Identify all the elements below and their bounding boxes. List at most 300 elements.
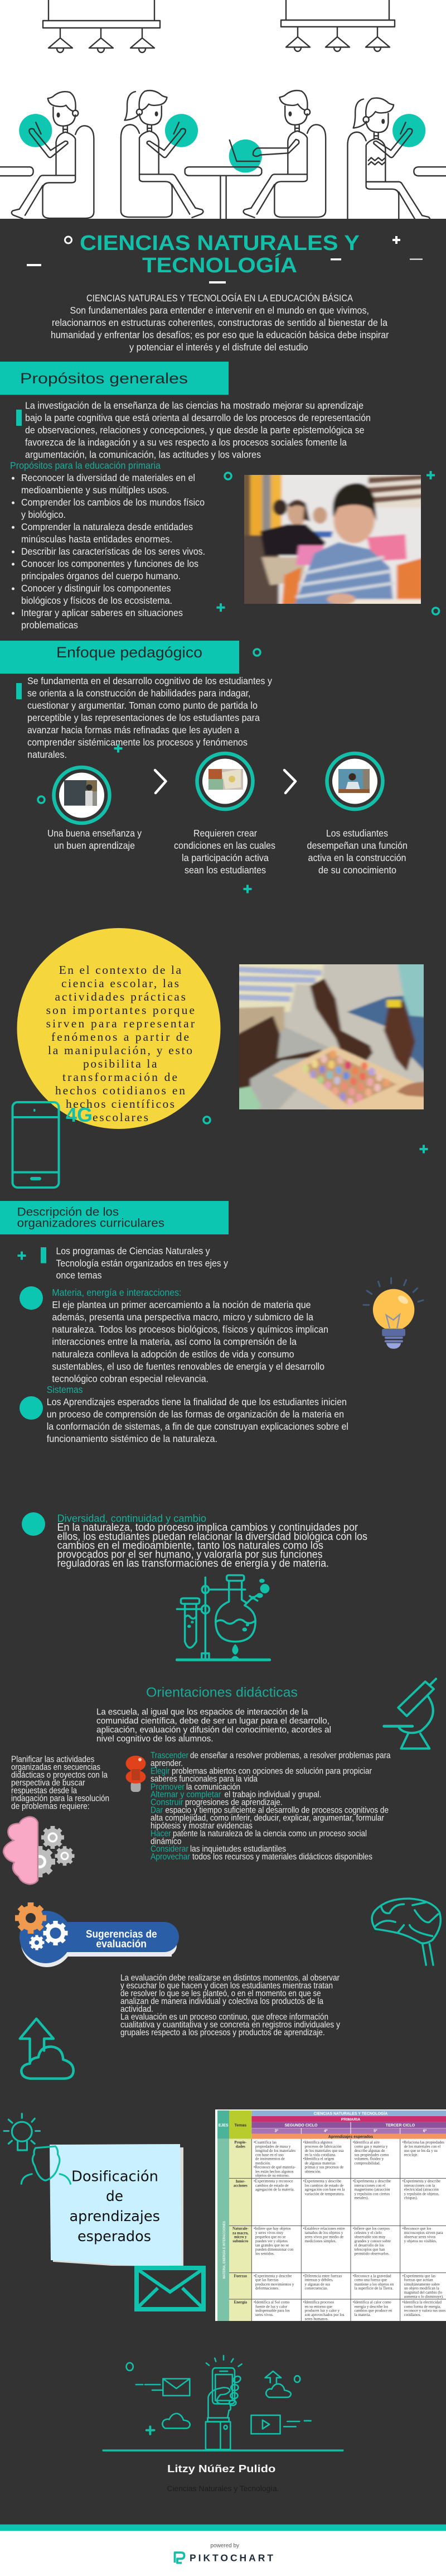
- heading: Descripción de los organizadores curriculares: [0, 1201, 229, 1234]
- row: Naturaleza macro, micro y submicro: •Reconoce que los: [403, 2227, 432, 2231]
- row: Naturaleza macro, micro y submicro: observable son muy: [355, 2235, 386, 2239]
- arrow: chevron 1: [155, 770, 166, 793]
- row: Interacciones: agregación con base en la: [305, 2188, 345, 2192]
- row: Energía: son aprovechados por los: [305, 2313, 345, 2317]
- badge: Sugerencias de evaluación: Sugerencias de: [86, 1929, 157, 1940]
- icon: chemistry flasks on stand: [177, 1575, 270, 1660]
- list: orientaciones didácticas: el trabajo individual y grupal.: [224, 1790, 321, 1800]
- row: Interacciones: magnetismo (atracción: [355, 2188, 390, 2192]
- text block: la escuela: La escuela, al igual que los espacios de interacción de la: [96, 1708, 308, 1717]
- axis 3: Diversidad, continuidad y cambio: ellos, los estudiantes puedan relacionar la diversidad biológica con los: [57, 1531, 367, 1542]
- photo: smiling boy in classroom: [244, 475, 421, 604]
- text block: planificar las actividades: indagación para la resolución: [11, 1794, 109, 1804]
- axis 1: Materia, energía e interacciones: además, presenta una perspectiva macro, micro y submicro de la: [52, 1311, 313, 1323]
- step 3: circular photo and caption: de su conocimiento: [318, 864, 396, 876]
- text block: introduction: humanidad y enfrentar los desafíos; es por eso que la educación básica debe inspirar: [51, 329, 389, 340]
- icon: arrow and cloud: [20, 2018, 74, 2079]
- row: Energía: la materia.: [355, 2313, 371, 2317]
- list: orientaciones didácticas: Hacer: [151, 1829, 171, 1838]
- callout: yellow circle with science text: sirven para representar: [46, 1017, 195, 1030]
- callout: yellow circle with science text: En el contexto de la: [59, 963, 181, 977]
- table column headers: TERCER CICLO: [386, 2123, 415, 2127]
- list: orientaciones didácticas: Elegir: [151, 1767, 170, 1776]
- author subtitle: Ciencias Naturales y Tecnología.: [167, 2484, 279, 2493]
- row: Naturaleza macro, micro y submicro: seres vivos por medio de: [305, 2235, 343, 2239]
- footer: powered by Piktochart: PIKTOCHART: [190, 2553, 273, 2564]
- callout: yellow circle with science text: ciencia escolar, las: [61, 977, 179, 990]
- callout: yellow circle with science text: escolares: [93, 1111, 148, 1124]
- row: Energía: •Identifica procesos: [303, 2300, 334, 2305]
- vertical axis label: MATERIA, ENERGÍA E INTERACCIONES: [221, 2221, 226, 2279]
- decorations: ring and plus: [203, 1117, 428, 1153]
- row: Propiedades: describe algunas de: [355, 2149, 385, 2153]
- row: Propiedades: con base en el uso: [255, 2152, 284, 2157]
- axis 2: Sistemas: [20, 1384, 348, 1444]
- row: Energía: fuente de luz y calor: [255, 2304, 288, 2309]
- axis 3: Diversidad, continuidad y cambio: reguladoras en las transformaciones de energía y de materia.: [57, 1558, 329, 1569]
- row: Energía: indispensable para los: [255, 2309, 290, 2313]
- photo: students in classroom: [338, 769, 370, 793]
- list: orientaciones didácticas: de enseñar a resolver problemas, a resolver problemas para: [190, 1751, 391, 1761]
- row: Fuerzas: un objeto modifican la: [404, 2286, 439, 2291]
- list: orientaciones didácticas: todos los recursos y materiales didácticos disponibles: [192, 1852, 372, 1862]
- text block: evaluación: La evaluación es un proceso continuo, que ofrece información: [120, 2012, 328, 2022]
- row: Naturaleza macro, micro y submicro: los sentidos.: [255, 2251, 275, 2256]
- text block: evaluación: [120, 1973, 340, 2037]
- row: Energía: cambios que produce en: [355, 2309, 392, 2313]
- row: Naturaleza macro, micro y submicro: [254, 2227, 443, 2256]
- text block: evaluación: La evaluación debe realizarse en distintos momentos, al observar: [120, 1973, 340, 1983]
- row: Energía: [254, 2300, 445, 2321]
- axis 3: Diversidad, continuidad y cambio: cambios en el medioambiente, tanto los naturales como los: [57, 1540, 323, 1551]
- row: Propiedades: propiedades de masa y: [255, 2145, 291, 2149]
- row: Propiedades: •Reconoce de qué materia-: [254, 2165, 296, 2170]
- row: Propiedades: reciclaje.: [404, 2152, 418, 2157]
- list: orientaciones didácticas: aprender.: [151, 1759, 183, 1768]
- text block: propósitos generales paragraph: favorezca de la indagación y a su ves respecto a los procesos sociales fomente la: [25, 436, 347, 448]
- row: Interacciones: los cambios de estado de: [305, 2183, 343, 2188]
- row: Fuerzas: que las fuerzas: [255, 2278, 279, 2282]
- logo mark: [175, 2553, 184, 2563]
- row: Naturaleza macro, micro y submicro: celestes y el cielo: [355, 2231, 382, 2235]
- list: orientaciones didácticas: dinámico: [151, 1837, 182, 1846]
- list: orientaciones didácticas: [151, 1751, 391, 1862]
- row: Fuerzas: fuerzas que actúan: [404, 2278, 433, 2282]
- axis 3: Diversidad, continuidad y cambio: Diversidad, continuidad y cambio: [57, 1513, 206, 1524]
- panel: sticky note Dosificación: de: [106, 2188, 123, 2205]
- list: orientaciones didácticas: progresiones de aprendizaje.: [185, 1798, 283, 1808]
- callout: yellow circle with science text: hechos científicos: [66, 1097, 174, 1111]
- row: Propiedades: •Cuantifica las: [254, 2140, 277, 2145]
- text block: propósitos generales paragraph: argumentación, la comunicación, las actitudes y los valores: [25, 449, 261, 460]
- row: Naturaleza macro, micro y submicro: observar seres vivos: [404, 2235, 436, 2239]
- row: Naturaleza macro, micro y submicro: y seres vivos muy: [255, 2231, 284, 2235]
- text block: propósitos generales paragraph: de observaciones, relaciones y concepciones, y que desde la parte epistemológica se: [25, 424, 365, 435]
- arrow: chevron 2: [284, 770, 295, 793]
- row: Fuerzas: consecuencias.: [305, 2286, 328, 2291]
- row: Interacciones: interacciones con la: [404, 2183, 435, 2188]
- row: Naturaleza macro, micro y submicro: pueden ver y objetos: [255, 2239, 288, 2243]
- step 1: circular photo and caption: Una buena enseñanza y: [47, 828, 142, 839]
- row: Naturaleza macro, micro y submicro: grandes y conoce sobre: [355, 2239, 391, 2243]
- photo: children with box of chalk: [239, 964, 424, 1109]
- row: Naturaleza macro, micro y submicro: tan grandes que no se: [255, 2243, 289, 2247]
- axis 1: Materia, energía e interacciones: sustentables, el uso de fuentes renovables de energía y el desarrollo: [52, 1361, 324, 1372]
- table column headers: 6º: [423, 2130, 427, 2133]
- row: Interacciones: chispas).: [404, 2196, 418, 2200]
- text block: enfoque pedagógico paragraph: naturales.: [27, 749, 67, 760]
- list: primary education purposes: Conocer y distinguir los componentes: [21, 583, 171, 594]
- row: Energía: como forma de energía,: [404, 2304, 441, 2309]
- list: orientaciones didácticas: hipótesis y mostrar evidencias: [151, 1821, 253, 1830]
- text block: evaluación: de resolver lo que se les planteó, o en el momento en que se: [120, 1989, 321, 1998]
- text block: enfoque pedagógico paragraph: [16, 675, 272, 760]
- heading: Propósitos generales: [0, 362, 229, 395]
- text block: programas intro: once temas: [56, 1270, 102, 1281]
- row: Propiedades: de los materiales que usa: [305, 2149, 343, 2153]
- icon: microscope: [384, 1679, 436, 1748]
- row: Propiedades: obtención.: [305, 2169, 321, 2174]
- callout: yellow circle with science text: [17, 928, 221, 1129]
- title: TECNOLOGÍA: [142, 253, 297, 277]
- icon: 4G smartphone: 4G: [66, 1103, 93, 1126]
- step 3: circular photo and caption: activa en la construcción: [308, 852, 406, 863]
- list: orientaciones didácticas: Considerar: [151, 1844, 189, 1854]
- title: [80, 232, 360, 277]
- row: Fuerzas: aumenta o lo disminuye).: [404, 2294, 444, 2299]
- row: Propiedades: •Relaciona las propiedades: [403, 2140, 444, 2145]
- text block: enfoque pedagógico paragraph: cuestionar y argumentar. Toman como punto de partida lo: [27, 700, 258, 711]
- step 2: circular photo and caption: condiciones en las cuales: [174, 840, 275, 851]
- row: Propiedades: uso que se les da y su: [404, 2149, 438, 2153]
- text block: enfoque pedagógico paragraph: perceptible y las representaciones de los estudiantes para: [27, 712, 260, 723]
- callout: yellow circle with science text: hechos cotidianos en: [55, 1084, 185, 1097]
- text block: programas intro: Tecnología están organizados en tres ejes y: [56, 1258, 228, 1269]
- axis 1: Materia, energía e interacciones: naturaleza. Todos los procesos biológicos, físicos y químicos implican: [52, 1324, 328, 1335]
- text block: la escuela: comunidad científica, debe de ser un lugar para el desarrollo,: [96, 1717, 329, 1726]
- axis 1: Materia, energía e interacciones: Materia, energía e interacciones:: [52, 1287, 182, 1298]
- list: primary education purposes: principales órganos del cuerpo humano.: [21, 570, 181, 581]
- table column headers: 5º: [374, 2130, 377, 2133]
- axis 1: Materia, energía e interacciones: tecnológico cobran especial relevancia.: [52, 1373, 209, 1384]
- row: Fuerzas: y algunas de sus: [305, 2282, 331, 2286]
- list: primary education purposes: [12, 472, 205, 631]
- text block: evaluación: analizan de manera individual y colectiva los productos de la: [120, 1997, 323, 2006]
- text block: introduction: relacionarnos en estructuras coherentes, constructoras de sentido al bienestar de la: [52, 317, 387, 328]
- icon: red push pin: [126, 1756, 146, 1792]
- row: Propiedades: en la vida cotidiana.: [305, 2152, 336, 2157]
- heading: Orientaciones didácticas: Orientaciones didácticas: [146, 1685, 298, 1700]
- list: primary education purposes: problematicas: [21, 619, 78, 631]
- axis 3: Diversidad, continuidad y cambio: [22, 1512, 367, 1569]
- icon: teal brain outline: [372, 1899, 440, 1965]
- text block: evaluación: y escuchar lo que hacen y dicen los estudiantes mientras tratan: [120, 1981, 333, 1991]
- row: Propiedades: longitud de los materiales: [255, 2149, 295, 2153]
- badge: Sugerencias de evaluación: [15, 1902, 179, 1967]
- row: Propiedades: •Identifica el origen: [303, 2157, 334, 2161]
- axis 2: Sistemas: funcionamiento sistémico de la naturaleza.: [47, 1433, 217, 1444]
- row: Naturaleza macro, micro y submicro: •Infiere que hay objetos: [254, 2227, 291, 2231]
- list: primary education purposes: biológicos y físicos de los ecosistema.: [21, 595, 172, 606]
- topic names: acciones: [234, 2183, 248, 2188]
- text block: programas intro: Los programas de Ciencias Naturales y: [56, 1246, 210, 1257]
- heading: Enfoque pedagógico: Enfoque pedagógico: [56, 644, 202, 661]
- heading: Propósitos generales: Propósitos generales: [20, 370, 188, 387]
- heading: Propósitos para la educación primaria: Propósitos para la educación primaria: [10, 460, 161, 471]
- step 3: circular photo and caption: [307, 753, 408, 876]
- badge shadow: [21, 1915, 177, 1967]
- decorations: plus and ring near process steps: [38, 744, 252, 893]
- topic names: Fuerzas: [234, 2274, 247, 2278]
- list: primary education purposes: Conocer los componentes y funciones de los: [21, 558, 198, 569]
- row: Fuerzas: •Experimenta y describe: [254, 2274, 292, 2278]
- step 2: circular photo and caption: [174, 753, 275, 876]
- callout: yellow circle with science text: fenómenos a partir de: [51, 1030, 189, 1044]
- row: Propiedades: [254, 2140, 444, 2178]
- row: Energía: •Identifica la electricidad: [403, 2300, 442, 2305]
- decorations: title sparkles: [27, 236, 423, 283]
- text block: planificar las actividades: respuestas desde la: [11, 1786, 77, 1796]
- topic names: dades: [236, 2145, 245, 2149]
- row: Propiedades: les están hechos algunos: [255, 2169, 294, 2174]
- illustration: students seated with devices: [0, 90, 446, 225]
- illustration: hand holding phone with media icons: [103, 2356, 343, 2450]
- row: Naturaleza macro, micro y submicro: mediciones simples.: [305, 2239, 337, 2243]
- axis 1: Materia, energía e interacciones: El eje plantea un primer acercamiento a la noción de materia que: [52, 1299, 311, 1310]
- row: Energía: seres humanos.: [305, 2317, 329, 2321]
- row: Energía: reconoce y valora sus usos: [404, 2309, 445, 2313]
- footer: powered by Piktochart: [0, 2531, 446, 2576]
- table column headers: Aprendizajes esperados: [328, 2135, 373, 2139]
- chart: learning dosage table: [215, 2109, 446, 2321]
- callout: yellow circle with science text: posibilita la: [83, 1057, 157, 1070]
- row: Naturaleza macro, micro y submicro: microscopios sirven para: [404, 2231, 443, 2235]
- row: Energía: producen luz y calor y: [305, 2309, 340, 2313]
- axis 1: Materia, energía e interacciones: interacciones entre la materia, así como la comprensión de la: [52, 1336, 297, 1347]
- table column headers: CIENCIAS NATURALES Y TECNOLOGÍA: [314, 2111, 387, 2116]
- callout: yellow circle with science text: son importantes porque: [46, 1003, 195, 1017]
- topic names: micro y: [234, 2235, 247, 2239]
- list: orientaciones didácticas: patente la naturaleza de la ciencia como un proceso social: [173, 1829, 367, 1838]
- text block: la escuela: aplicación, evaluación y difusión del conocimiento, acordes al: [96, 1726, 331, 1735]
- topic names: Naturale-: [232, 2227, 249, 2231]
- list: orientaciones didácticas: Aprovechar: [151, 1852, 191, 1862]
- axis 2: Sistemas: la conformación de sistemas, a fin de que construyan explicaciones sobre el: [47, 1421, 348, 1432]
- row: Interacciones: interacciones con el: [355, 2183, 385, 2188]
- row: Fuerzas: simultáneamente sobre: [404, 2282, 440, 2286]
- table column headers: EJES: [219, 2124, 229, 2128]
- list: primary education purposes: Comprender los cambios de los mundos físico: [21, 497, 205, 508]
- row: Naturaleza macro, micro y submicro: y objetos no visibles.: [404, 2239, 437, 2243]
- text block: evaluación: grupales respecto a los procesos y productos de aprendizaje.: [120, 2028, 325, 2037]
- footer bar: [0, 2525, 446, 2531]
- illustration: hanging ceiling lamps: [43, 0, 395, 52]
- icon: half brain with gears: [3, 1817, 74, 1884]
- text block: la escuela: [96, 1708, 331, 1744]
- text block: introduction: Son fundamentales para entender e intervenir en el mundo en que vivimos,: [70, 305, 369, 316]
- row: Fuerzas: intensas y débiles,: [305, 2278, 333, 2282]
- row: Fuerzas: mantiene a los objetos en: [355, 2282, 394, 2286]
- text block: enfoque pedagógico paragraph: Se fundamenta en el desarrollo cognitivo de los estudiantes y: [27, 675, 272, 686]
- axis 3: Diversidad, continuidad y cambio: provocados por el ser humano, y valorarla por sus funciones: [57, 1549, 322, 1560]
- text block: la escuela: nivel cognitivo de los alumnos.: [96, 1734, 214, 1744]
- text block: evaluación: cualitativa y cuantitativa y se concreta en registros individuales y: [120, 2020, 340, 2030]
- list: orientaciones didácticas: Promover: [151, 1782, 185, 1792]
- axis 3: Diversidad, continuidad y cambio: En la naturaleza, todo proceso implica cambios y continuidades por: [57, 1522, 358, 1534]
- text block: planificar las actividades: didácticas o proyectos con la: [11, 1771, 108, 1780]
- topic names: Energía: [234, 2300, 248, 2305]
- step 1: circular photo and caption: un buen aprendizaje: [54, 840, 135, 851]
- photo: child at chalkboard: [64, 780, 97, 806]
- list: primary education purposes: Describir las características de los seres vivos.: [21, 546, 205, 557]
- table column headers: 3º: [274, 2130, 278, 2133]
- axis 1: Materia, energía e interacciones: naturaleza conlleva la adopción de estilos de vida y consumo: [52, 1348, 294, 1359]
- row: Interacciones: •Experimenta y describe: [303, 2179, 341, 2184]
- row: Energía: en su entorno que: [305, 2304, 332, 2309]
- text block: enfoque pedagógico paragraph: avanzar hacia formas más refinadas que les ayuden a: [27, 724, 239, 736]
- list: orientaciones didácticas: Construir: [151, 1798, 183, 1808]
- row: Energía: energía y describe los: [355, 2304, 389, 2309]
- row: Propiedades: objetos de su entorno.: [255, 2174, 290, 2178]
- heading: Descripción de los organizadores curriculares: organizadores curriculares: [17, 1217, 164, 1230]
- list: orientaciones didácticas: problemas abiertos con opciones de solución para propiciar: [172, 1767, 372, 1776]
- text block: propósitos generales paragraph: [16, 400, 371, 460]
- row: Fuerzas: •Experimenta que las: [403, 2274, 435, 2278]
- row: Fuerzas: deformaciones.: [255, 2286, 279, 2291]
- row: Propiedades: de algunas materias: [305, 2161, 336, 2165]
- panel: sticky note Dosificación: aprendizajes: [69, 2208, 160, 2225]
- list: orientaciones didácticas: espacio y tiempo suficiente al desarrollo de procesos cognitivos de: [165, 1806, 389, 1815]
- decorations: rings and plus around classroom photo: [216, 471, 439, 614]
- text block: introduction: CIENCIAS NATURALES Y TECNOLOGÍA EN LA EDUCACIÓN BÁSICA: [86, 292, 353, 304]
- text block: propósitos generales paragraph: bajo la parte cognitiva que está orienta al desarrollo de los procesos de representación: [25, 412, 371, 423]
- row: Interacciones: electricidad (atracción: [404, 2188, 439, 2192]
- list: orientaciones didácticas: las inquietudes estudiantiles: [190, 1844, 286, 1854]
- list: orientaciones didácticas: alta complejidad, como inferir, deducir, explicar, argumentar, formular: [151, 1814, 385, 1823]
- row: Propiedades: sus propiedades como: [355, 2152, 389, 2157]
- row: Fuerzas: la superficie de la Tierra.: [355, 2286, 394, 2291]
- row: Energía: seres vivos.: [255, 2313, 274, 2317]
- row: Energía: •Identifica al Sol como: [254, 2300, 290, 2305]
- row: Naturaleza macro, micro y submicro: pequeños que no se: [255, 2235, 286, 2239]
- row: Interacciones: agregación de la materia.: [255, 2188, 294, 2192]
- row: Interacciones: variación de temperatura.: [305, 2191, 345, 2196]
- icon: 4G smartphone: [12, 1102, 93, 1188]
- table column headers: 4º: [324, 2130, 328, 2133]
- topic names: [232, 2140, 249, 2305]
- table column headers: PRIMARIA: [341, 2118, 360, 2122]
- list: primary education purposes: Integrar y aplicar saberes en situaciones: [21, 607, 183, 618]
- step 2: circular photo and caption: Requieren crear: [193, 828, 257, 839]
- row: Propiedades: compresibilidad.: [355, 2161, 381, 2165]
- list: primary education purposes: medioambiente y sus múltiples usos.: [21, 484, 169, 496]
- list: orientaciones didácticas: Dar: [151, 1806, 163, 1815]
- photo: child reading a book: [209, 769, 243, 790]
- icon: light bulb: [363, 1278, 423, 1349]
- row: Naturaleza macro, micro y submicro: •Establece relaciones entre: [303, 2227, 345, 2231]
- row: Interacciones: [254, 2179, 440, 2200]
- badge: Sugerencias de evaluación: evaluación: [96, 1939, 147, 1950]
- axis 2: Sistemas: Sistemas: [47, 1384, 83, 1395]
- text block: enfoque pedagógico paragraph: comprender sistémicamente los procesos y fenómenos: [27, 737, 248, 748]
- row: Naturaleza macro, micro y submicro: tamaños de los objetos y: [305, 2231, 343, 2235]
- heading: Descripción de los organizadores curriculares: Descripción de los: [17, 1205, 119, 1219]
- row: Propiedades: de los materiales con el: [404, 2145, 440, 2149]
- step 2: circular photo and caption: sean los estudiantes: [185, 864, 266, 876]
- footer: powered by Piktochart: powered by: [211, 2543, 240, 2549]
- badge body: [20, 1911, 179, 1963]
- row: Fuerzas: como una fuerza que: [355, 2278, 387, 2282]
- callout: yellow circle with science text: actividades prácticas: [55, 990, 186, 1003]
- list: primary education purposes: y biológico.: [21, 509, 66, 520]
- topic names: Propie-: [234, 2140, 247, 2145]
- heading: Enfoque pedagógico: [0, 641, 239, 674]
- row: Naturaleza macro, micro y submicro: permitido observarlos.: [355, 2251, 390, 2256]
- topic names: Inter-: [236, 2179, 246, 2184]
- icon: idea bulb over head: [4, 2114, 71, 2184]
- text block: programas intro: [18, 1246, 228, 1281]
- panel: sticky note Dosificación: Dosificación: [71, 2169, 158, 2185]
- axis 2: Sistemas: Los Aprendizajes esperados tiene la finalidad de que los estudiantes inicien: [47, 1396, 347, 1407]
- row: Propiedades: primas y sus procesos de: [305, 2165, 343, 2170]
- row: Fuerzas: producen movimientos y: [255, 2282, 294, 2286]
- row: Interacciones: •Experimenta y reconoce: [254, 2179, 293, 2184]
- text block: planificar las actividades: organizadas en secuencias: [11, 1763, 100, 1772]
- row: Propiedades: •Identifica algunos: [303, 2140, 333, 2145]
- list: orientaciones didácticas: la comunicación: [186, 1782, 240, 1792]
- row: Energía: •Identifica al calor como: [353, 2300, 391, 2305]
- row: Propiedades: procesos de fabricación: [305, 2145, 342, 2149]
- row: Interacciones: cambios de estado de: [255, 2183, 289, 2188]
- row: Interacciones: y repulsión de objetos,: [404, 2191, 439, 2196]
- text block: planificar las actividades: perspectiva de buscar: [11, 1779, 85, 1788]
- row: Propiedades: •Identifica al aire: [353, 2140, 380, 2145]
- row: Naturaleza macro, micro y submicro: •Infiere que los cuerpos: [353, 2227, 390, 2231]
- topic names: za macro,: [232, 2231, 249, 2235]
- table column headers: SEGUNDO CICLO: [285, 2123, 318, 2127]
- list: orientaciones didácticas: Alternar y completar: [151, 1790, 221, 1800]
- row: Interacciones: y repulsión con ciertos: [355, 2191, 390, 2196]
- row: Interacciones: metales).: [355, 2196, 369, 2200]
- author name: Litzy Núñez Pulido: [167, 2463, 275, 2474]
- list: primary education purposes: Comprender la naturaleza desde entidades: [21, 521, 193, 532]
- text block: propósitos generales paragraph: La investigación de la enseñanza de las ciencias ha mostrado mejorar su aprendizaje: [25, 400, 363, 411]
- step 1: circular photo and caption: [47, 767, 142, 851]
- row: Energía: cotidianos.: [404, 2313, 421, 2317]
- icon: teal envelope: [137, 2268, 203, 2309]
- row: Fuerzas: •Diferencia entre fuerzas: [303, 2274, 342, 2278]
- callout: yellow circle with science text: la manipulación, y esto: [48, 1044, 192, 1057]
- list: orientaciones didácticas: saberes funcionales para la vida: [151, 1775, 258, 1784]
- list: primary education purposes: minúsculas hasta entidades enormes.: [21, 534, 172, 545]
- table column headers: Temas: [235, 2124, 246, 2128]
- row: Fuerzas: magnitud del cambio (lo: [404, 2290, 443, 2295]
- title: CIENCIAS NATURALES Y: [80, 232, 360, 255]
- text block: planificar las actividades: [11, 1755, 109, 1811]
- table column headers: [217, 2111, 446, 2139]
- text block: planificar las actividades: de problemas requiere:: [11, 1801, 90, 1811]
- row: Naturaleza macro, micro y submicro: pueden dimensionar con: [255, 2247, 294, 2252]
- decoration: ring beside heading: [254, 649, 260, 656]
- row: Interacciones: •Experimenta y describe: [353, 2179, 391, 2184]
- row: Propiedades: de instrumentos de: [255, 2157, 285, 2161]
- text block: planificar las actividades: Planificar las actividades: [11, 1755, 94, 1765]
- step 3: circular photo and caption: desempeñan una función: [307, 840, 408, 851]
- topic names: submicro: [232, 2239, 249, 2243]
- panel: sticky note Dosificación: [50, 2144, 183, 2266]
- text block: evaluación: actividad.: [120, 2005, 153, 2014]
- row: Fuerzas: [254, 2274, 444, 2299]
